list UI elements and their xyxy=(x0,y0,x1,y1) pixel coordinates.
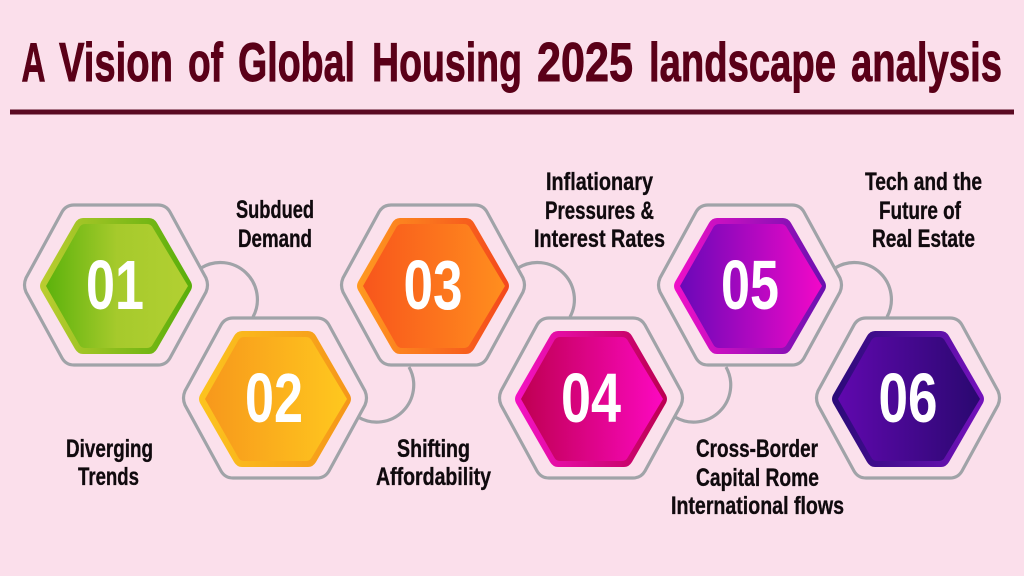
hexagon 06 xyxy=(816,318,1000,478)
hexagon 05 xyxy=(658,205,842,365)
label: Cross-Border Capital Rome International flows: Cross-Border xyxy=(696,435,818,463)
label: Cross-Border Capital Rome International flows: Capital Rome xyxy=(696,464,819,492)
label: Shifting Affordability: Shifting xyxy=(397,435,470,463)
label: Cross-Border Capital Rome International flows xyxy=(671,435,844,520)
label: Diverging Trends xyxy=(66,435,153,491)
hexagon 01: 01 xyxy=(86,246,144,324)
label: Subdued Demand: Demand xyxy=(238,225,312,253)
label: Inflationary Pressures and Interest Rates: Interest Rates xyxy=(534,225,665,253)
title: landscape xyxy=(649,31,836,93)
hexagon 03 xyxy=(342,205,524,365)
label: Diverging Trends: Diverging xyxy=(66,435,153,463)
label: Subdued Demand xyxy=(236,196,314,253)
label: Tech and the Future of Real Estate xyxy=(865,168,982,253)
label: Tech and the Future of Real Estate: Tech and the xyxy=(865,168,982,196)
label: Inflationary Pressures and Interest Rates: Inflationary xyxy=(546,168,653,196)
hexagon 02: 02 xyxy=(245,359,303,437)
label: Cross-Border Capital Rome International flows: International flows xyxy=(671,492,844,520)
label: Inflationary Pressures and Interest Rates: Pressures & xyxy=(545,197,654,225)
title: Vision xyxy=(59,31,173,93)
hexagon 01 xyxy=(24,205,208,365)
hexagon 02 xyxy=(184,318,366,478)
title xyxy=(22,31,1002,93)
title: A xyxy=(22,31,46,93)
hexagon 06: 06 xyxy=(878,359,938,437)
title: of xyxy=(188,31,223,93)
label: Diverging Trends: Trends xyxy=(78,463,139,491)
connector lines between hexagons xyxy=(201,263,891,422)
hexagon 04 xyxy=(500,318,682,478)
label: Shifting Affordability xyxy=(376,435,491,491)
label: Subdued Demand: Subdued xyxy=(236,196,314,224)
hexagon 03: 03 xyxy=(404,246,462,324)
hexagon 05: 05 xyxy=(721,246,779,324)
label: Tech and the Future of Real Estate: Future of xyxy=(879,197,961,225)
hexagon 04: 04 xyxy=(561,359,621,437)
label: Inflationary Pressures and Interest Rates xyxy=(534,168,665,253)
title: Housing xyxy=(372,31,522,93)
label: Shifting Affordability: Affordability xyxy=(376,463,491,491)
title: 2025 xyxy=(537,31,633,93)
label: Tech and the Future of Real Estate: Real Estate xyxy=(872,225,975,253)
title: Global xyxy=(238,31,355,93)
